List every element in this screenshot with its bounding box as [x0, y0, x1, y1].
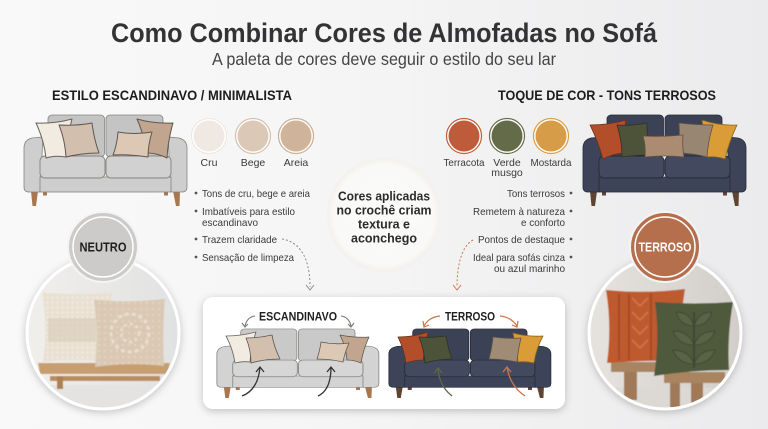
center callout: no crochê criam: [336, 202, 432, 218]
arrows: grey top: [242, 316, 354, 327]
sofa: navy with earthy cushions: [583, 115, 746, 206]
center callout: [326, 157, 442, 273]
bullet list: terroso: e conforto: [521, 218, 565, 229]
photo: neutral cushions: [25, 255, 181, 411]
bullet list: terroso: ou azul marinho: [494, 264, 565, 275]
heading: escandinavo: ESTILO ESCANDINAVO / MINIMALISTA: [52, 87, 292, 103]
sofa: light with neutral cushions: [24, 115, 187, 206]
badge: terroso: TERROSO: [638, 240, 692, 254]
badge: terroso: [630, 212, 700, 282]
label: cru: Cru: [201, 157, 218, 169]
sofa: terroso: [389, 329, 551, 398]
bullet list: terroso: Remetem à natureza: [473, 207, 565, 218]
sofa: escandinavo: [217, 329, 379, 398]
bullet list: escandinavo: escandinavo: [202, 218, 258, 229]
subtitle: A paleta de cores deve seguir o estilo do seu lar: [212, 49, 556, 69]
badge: neutro: NEUTRO: [80, 240, 127, 254]
panel: comparison: [203, 297, 565, 409]
bullet list: escandinavo: Imbatíveis para estilo: [202, 207, 295, 218]
swatch: bege: [236, 118, 270, 154]
swatch: terracota: [446, 118, 482, 154]
badge: neutro: [68, 212, 138, 282]
label: verde musgo: musgo: [491, 167, 523, 179]
label: terroso: TERROSO: [445, 310, 495, 324]
arrow: dashed orange: [453, 240, 473, 290]
bullet list: escandinavo: [195, 189, 310, 264]
bullet list: terroso: Tons terrosos: [507, 189, 565, 200]
arrow: orange: [503, 367, 525, 396]
label: areia: Areia: [284, 157, 308, 169]
label: bege: Bege: [241, 157, 265, 169]
swatch: cru: [192, 118, 226, 154]
bullet list: terroso: [473, 189, 572, 275]
label: mostarda: Mostarda: [530, 157, 572, 169]
center callout: textura e: [358, 216, 410, 232]
label: terracota: Terracota: [444, 157, 485, 169]
label: escandinavo: ESCANDINAVO: [259, 310, 337, 324]
arrows: dark pointing to cushions: [242, 367, 335, 396]
bullet list: terroso: Pontos de destaque: [478, 235, 565, 246]
arrow: green: [434, 368, 452, 396]
arrow: dashed grey: [282, 239, 314, 290]
center callout: aconchego: [351, 230, 417, 246]
label: verde musgo: Verde: [493, 157, 521, 169]
arrows: orange top: [423, 316, 518, 327]
bullet list: escandinavo: Trazem claridade: [202, 235, 277, 246]
title: Como Combinar Cores de Almofadas no Sofá: [111, 18, 658, 48]
center callout: Cores aplicadas: [338, 188, 430, 204]
swatch: areia: [278, 118, 314, 154]
swatch: mostarda: [534, 118, 568, 154]
bullet list: escandinavo: Sensação de limpeza: [202, 253, 294, 264]
photo: earthy cushions: [587, 255, 743, 411]
bullet list: escandinavo: Tons de cru, bege e areia: [202, 189, 310, 200]
swatch: verde musgo: [490, 118, 524, 154]
heading: terrosos: TOQUE DE COR - TONS TERROSOS: [498, 87, 716, 103]
bullet list: terroso: Ideal para sofás cinza: [473, 253, 565, 264]
